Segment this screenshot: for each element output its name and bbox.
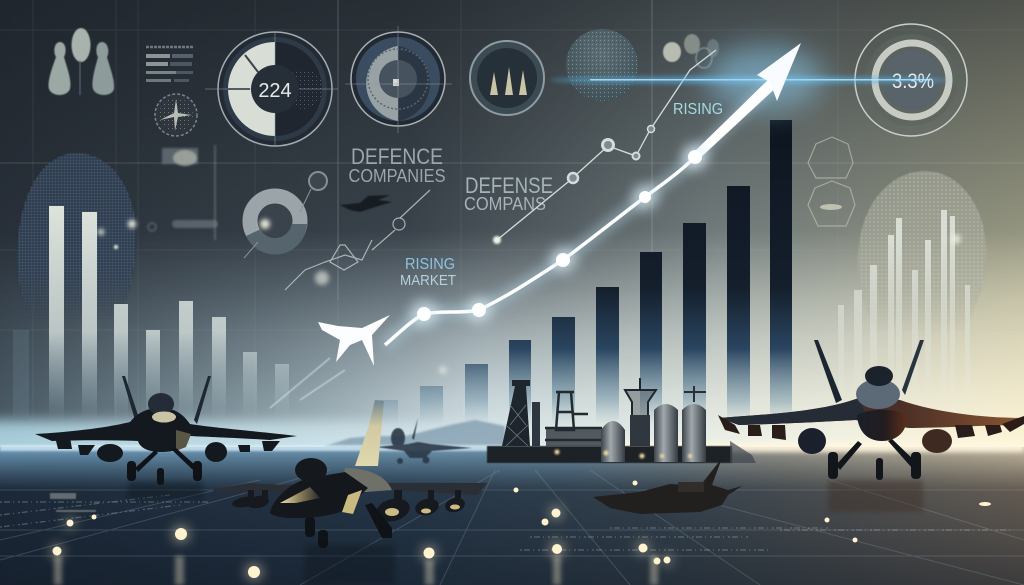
title: DEFENSE COMPANS [464, 173, 553, 214]
title: DEFENSE COMPANS: COMPANS [464, 194, 546, 214]
small device with labels [148, 145, 218, 240]
aircraft reflections on floor [128, 480, 923, 585]
icon: three pawn shapes [49, 28, 114, 95]
left dotted globe [17, 153, 136, 320]
title: DEFENCE COMPANIES: DEFENCE [351, 144, 443, 169]
debris near left jet [50, 493, 96, 512]
floating sparkles [98, 220, 961, 374]
label: RISING MARKET: RISING [405, 256, 455, 273]
arrow head [757, 43, 801, 101]
right dotted globe [858, 171, 986, 309]
landing gear [127, 448, 202, 485]
rising market arrow with glowing nodes [385, 43, 801, 345]
title: DEFENCE COMPANIES: COMPANIES [348, 166, 446, 186]
title: DEFENSE COMPANS: DEFENSE [465, 173, 553, 198]
floor lights and reflections [51, 480, 991, 585]
label: RISING: RISING [673, 101, 723, 118]
missiles [231, 490, 466, 525]
weapons and pods [55, 437, 280, 462]
silhouette: ship [593, 458, 742, 514]
lens with missile icons [470, 41, 544, 115]
small node network left [285, 190, 430, 290]
pie gauge showing 224 [205, 32, 338, 146]
wing pods and weapons [798, 428, 826, 454]
left light bar chart [13, 206, 289, 421]
icon: compass dial [155, 94, 197, 136]
thin trend line with nodes [497, 50, 716, 240]
dark rising bar chart [380, 120, 792, 428]
label: RISING MARKET: MARKET [400, 272, 456, 289]
icon cluster: small spheres [663, 34, 719, 68]
distant hills [320, 420, 505, 448]
textured sphere [566, 29, 638, 101]
ring chart with striped half [345, 26, 452, 133]
small device icon [162, 148, 198, 166]
lower donut chart [244, 172, 327, 258]
landing gear [305, 503, 392, 548]
jet: right fighter [718, 340, 1024, 480]
background: dark-to-bright gradient sky [0, 0, 1024, 447]
landing gear [828, 439, 921, 480]
jet: left fighter [35, 376, 297, 485]
panel: small data list [146, 47, 194, 82]
jet: front gold fighter [212, 400, 487, 548]
hexagon icons [808, 137, 855, 226]
value: 224: 224 [258, 80, 292, 102]
lens flare [550, 46, 950, 110]
right faint bar chart [838, 210, 970, 415]
icon: dark aircraft silhouette [340, 195, 392, 212]
glowing data points [410, 144, 708, 328]
icon: white airplane [318, 315, 390, 366]
faint lower trend streak [270, 358, 345, 408]
title: DEFENCE COMPANIES [348, 144, 446, 186]
silhouette: industrial plant [487, 378, 756, 463]
jet: distant aircraft [376, 418, 472, 464]
right ring showing 3.3% [855, 24, 967, 136]
value: 3.3%: 3.3% [892, 70, 934, 93]
label: RISING MARKET [400, 256, 456, 289]
runway floor [0, 442, 1024, 585]
